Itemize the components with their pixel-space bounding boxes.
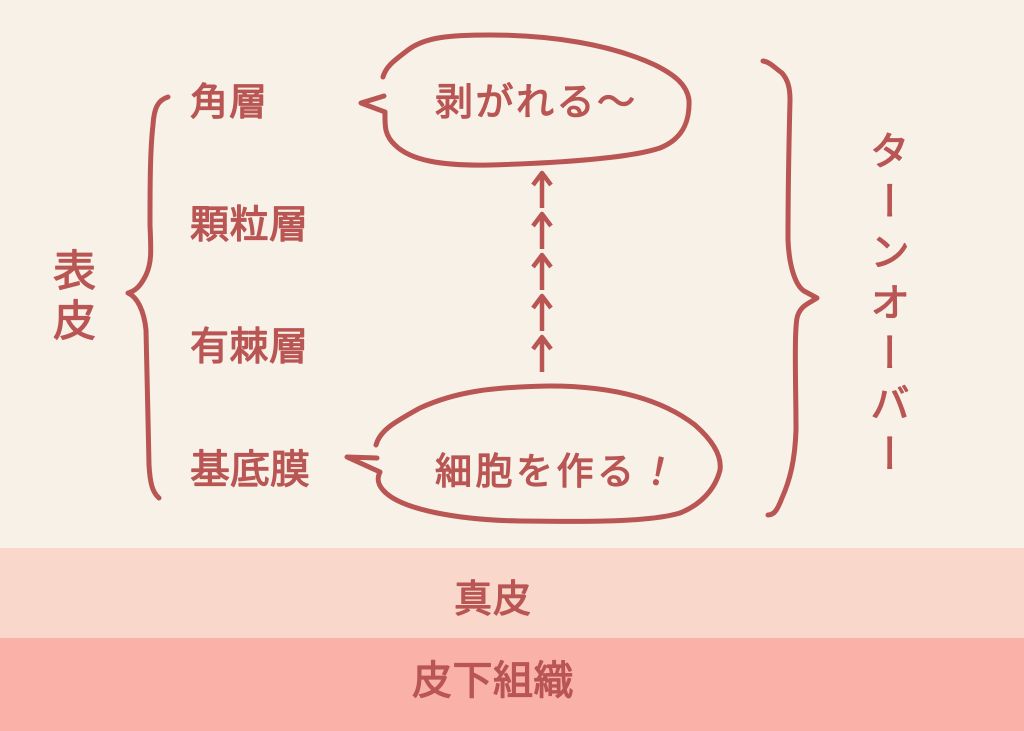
label: 角層: 角層 xyxy=(190,82,268,124)
speech bubble: 剥がれる: 剥がれる〜 xyxy=(435,82,638,124)
heading: 表皮: 表 xyxy=(53,248,96,296)
label: 顆粒層: 顆粒層 xyxy=(190,204,309,247)
band: 皮下組織 xyxy=(0,638,1024,731)
speech bubble: 細胞を作る xyxy=(347,386,720,521)
band: 真皮 xyxy=(0,548,1024,638)
vertical text: ターンオーバー: ターンオーバー xyxy=(864,130,908,484)
label: 基底膜: 基底膜 xyxy=(190,448,310,492)
left brace xyxy=(128,97,168,498)
heading: 表皮: 皮 xyxy=(53,298,96,346)
speech bubble: 剥がれる xyxy=(361,35,689,165)
right brace xyxy=(763,61,817,515)
heading: 表皮 xyxy=(53,248,96,346)
speech bubble: 細胞を作る: 細胞を作る xyxy=(435,451,638,492)
arrows: upward turnover xyxy=(533,173,551,372)
band: 皮下組織: 皮下組織 xyxy=(412,659,574,703)
label: 有棘層: 有棘層 xyxy=(190,326,309,369)
speech bubble: 細胞を作る: ！ xyxy=(636,448,680,496)
layer labels xyxy=(190,82,310,492)
band: 真皮: 真皮 xyxy=(454,579,532,621)
